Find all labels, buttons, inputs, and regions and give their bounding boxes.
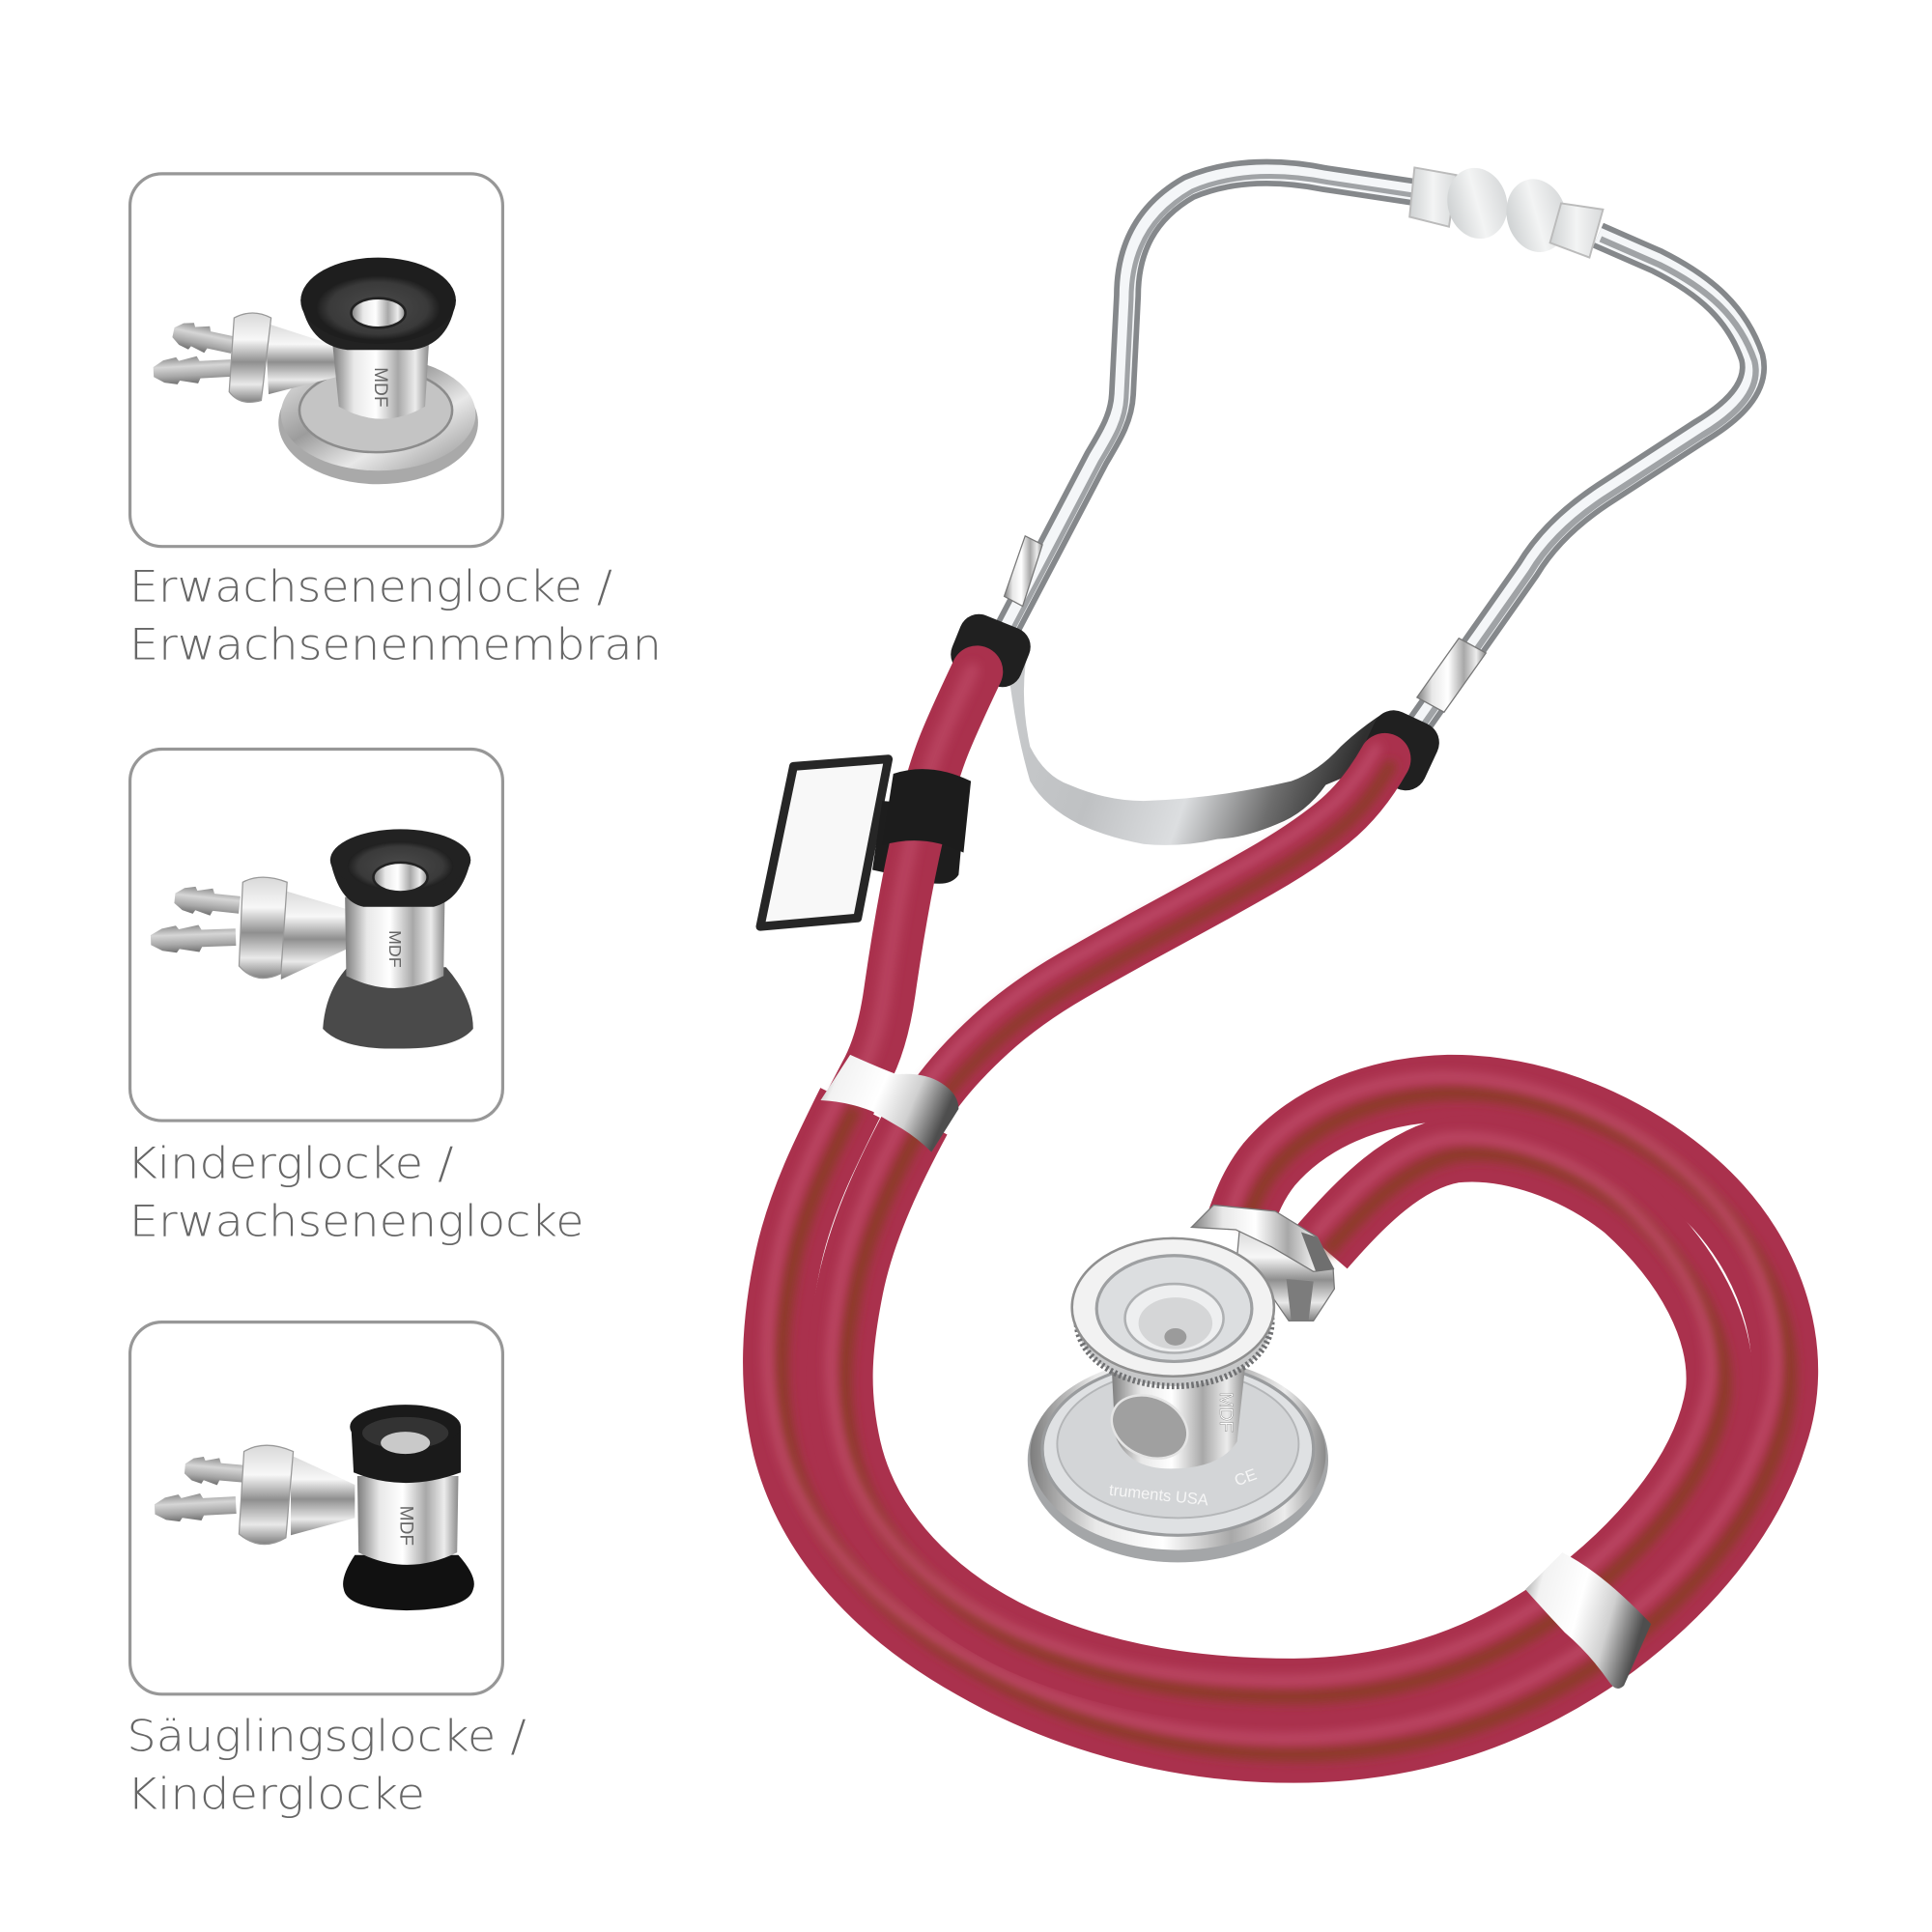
stethoscope — [760, 161, 1790, 1754]
frame — [130, 1322, 502, 1694]
diaphragm disc: truments USA — [1108, 1481, 1210, 1509]
side button — [1101, 1383, 1198, 1470]
caption: Erwachsenenglocke / — [129, 561, 612, 611]
caption — [129, 561, 662, 669]
diaphragm disc — [1028, 1358, 1328, 1562]
icon: infant chestpiece — [154, 1405, 474, 1610]
panel: paediatric bell and adult bell — [127, 750, 584, 1246]
outer loop tube — [768, 1077, 1790, 1754]
caption: Kinderglocke — [127, 1769, 425, 1819]
rubber tubing — [768, 670, 1790, 1754]
icon: adult chestpiece — [153, 258, 478, 484]
leaf spring — [1010, 639, 1385, 845]
frame — [130, 174, 502, 547]
clear joint — [1409, 161, 1603, 259]
bell rim — [1072, 1238, 1274, 1377]
caption: Erwachsenenmembran — [129, 619, 662, 669]
caption — [127, 1138, 584, 1246]
stem — [1112, 1361, 1246, 1468]
name tag — [760, 759, 965, 926]
tag holder front — [882, 769, 971, 853]
y-connector — [1191, 1205, 1334, 1321]
caption: Erwachsenenglocke — [129, 1196, 584, 1246]
inner loop tube — [831, 1108, 1724, 1696]
black ear-tube rings — [945, 609, 1446, 797]
brand mark: MDF — [1215, 1392, 1236, 1433]
panel: adult bell and adult diaphragm — [129, 174, 662, 669]
icon: paediatric chestpiece — [151, 829, 473, 1049]
panel: infant bell and paediatric bell — [127, 1322, 526, 1819]
left upper tube — [845, 670, 977, 1103]
icon: paediatric chestpiece: MDF — [385, 930, 405, 968]
right upper tube — [925, 748, 1390, 1104]
caption: Kinderglocke / — [127, 1138, 453, 1188]
bell skirt — [1077, 1258, 1271, 1386]
diaphragm disc: CE — [1232, 1464, 1259, 1490]
icon: adult chestpiece: MDF — [370, 367, 390, 408]
frame — [130, 750, 502, 1121]
icon: infant chestpiece: MDF — [396, 1506, 416, 1546]
tube clip upper — [820, 1055, 958, 1152]
chestpiece — [1028, 1205, 1334, 1562]
tube collars — [1005, 536, 1486, 712]
bell interior — [1096, 1256, 1252, 1361]
headset binaurals — [1005, 173, 1756, 730]
tube clip lower — [1525, 1552, 1651, 1689]
caption — [127, 1712, 526, 1819]
caption: Säuglingsglocke / — [127, 1711, 526, 1761]
